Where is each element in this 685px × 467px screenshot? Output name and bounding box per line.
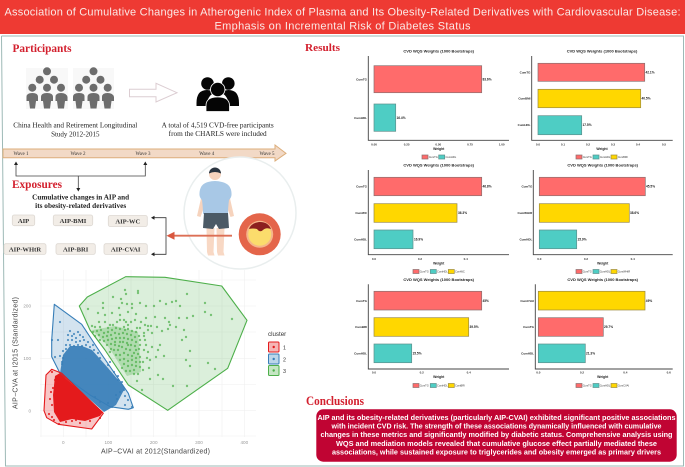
timeline arrow: Wave 1: [13, 152, 29, 157]
bar chart: CumTG, CumWHtR, CumHDL: CumWHtR: [517, 211, 533, 215]
x axis title: AIP−CVAI at 2012(Standardized): [101, 448, 210, 456]
heading: exposures: Exposures: [12, 179, 63, 191]
text: study description: [13, 122, 137, 138]
bar chart: CumTG, CumBRI, CumHDL: 15.5%: [412, 352, 422, 356]
bar chart: CumCVAI, CumTG, CumHDL: 0.0: [536, 370, 541, 374]
exposure box: AIP-WC: [108, 216, 147, 226]
title banner: Emphasis on Incremental Risk of Diabetes Status: [214, 20, 471, 32]
bar chart: CumCVAI, CumTG, CumHDL: CumHDL: [521, 352, 534, 356]
bar chart: CumTG, CumWHtR, CumHDL: CumWHtR: [618, 270, 630, 274]
bar chart: CumTG, CumWHtR, CumHDL: 0.4: [631, 257, 635, 261]
title banner: Association of Cumulative Changes in Atherogenic Index of Plasma and Its Obesity-Related Derivatives with Cardiovascular Disease:: [4, 6, 680, 18]
bar chart: CumTG, CumBRI, CumHDL: CumHDL: [354, 352, 367, 356]
bar chart: CumTG, CumBMI, CumHDL: CumHDL: [518, 123, 531, 127]
bar chart: CumTG, CumBMI, CumHDL: 0.5: [662, 142, 666, 146]
exposure box: AIP-WHtR: [4, 244, 46, 254]
exposure box: AIP-BRI: AIP-BRI: [63, 246, 89, 254]
exposure box: AIP-BMI: AIP-BMI: [60, 218, 87, 225]
bar chart: CumTG, CumWHtR, CumHDL: [517, 162, 673, 274]
cluster legend: 3: [283, 369, 286, 375]
heading: participants: Participants: [12, 41, 72, 55]
bar chart: CumCVAI, CumTG, CumHDL: 29.7%: [604, 325, 613, 329]
text: cohort size: A total of 4,519 CVD-free participants: [162, 122, 274, 130]
bar chart: CumTG vs CumHDL: 83.6%: [482, 78, 492, 82]
arrow: artery to exposures: [166, 232, 232, 240]
bar chart: CumTG, CumWC, CumHDL: CumHDL: [354, 238, 367, 242]
bar chart: CumTG, CumBMI, CumHDL: CumBMI: [618, 155, 628, 159]
bar chart: CumCVAI, CumTG, CumHDL: CumCVAI: [520, 299, 534, 303]
bar chart: CumTG, CumBRI, CumHDL: 45%: [482, 299, 489, 303]
exposure box: AIP-CVAI: AIP-CVAI: [111, 246, 141, 254]
axis tick labels: 300: [195, 440, 203, 445]
bar chart: CumTG, CumWHtR, CumHDL: Weight: [597, 262, 609, 266]
callout: conclusions text: associations, while sustained exposure to triglycerides and obesity emerged as primary drivers: [332, 449, 661, 456]
bar chart: CumTG, CumWHtR, CumHDL: 45.5%: [646, 184, 655, 188]
y axis title: AIP−CVA at I2015 (Standardized): [12, 297, 20, 409]
bar chart: CumTG, CumBMI, CumHDL: CumBMI: [518, 96, 531, 100]
bar chart: CumTG, CumWC, CumHDL: 0.4: [464, 257, 468, 261]
callout: conclusions text: [316, 409, 677, 462]
bar chart: CumTG, CumBRI, CumHDL: [354, 277, 509, 388]
exposure box: AIP: AIP: [18, 218, 29, 225]
bar chart: CumTG, CumWC, CumHDL: 36.3%: [458, 211, 467, 215]
bar chart: CumTG, CumWHtR, CumHDL: CumHDL: [600, 270, 611, 274]
bar chart: CumTG, CumBMI, CumHDL: 0.4: [636, 142, 640, 146]
exposure box: AIP-WHtR: AIP-WHtR: [9, 246, 41, 254]
exposure box: AIP-WC: AIP-WC: [115, 218, 140, 226]
bar chart: CumTG vs CumHDL: CumHDL: [446, 155, 457, 159]
bar chart: CumCVAI, CumTG, CumHDL: 0.4: [623, 370, 628, 374]
bar chart: CumTG, CumBMI, CumHDL: 0.0: [536, 142, 540, 146]
bar chart: CumTG, CumBMI, CumHDL: 0.3: [611, 142, 615, 146]
bar chart: CumTG, CumWC, CumHDL: CVD WQS Weights (1000 Bootstraps): [403, 162, 475, 168]
icon: CVD-free participants: [196, 77, 239, 112]
bar chart: CumTG, CumBRI, CumHDL: 0.4: [467, 370, 471, 374]
bar chart: CumTG, CumBRI, CumHDL: CumBRI: [455, 384, 465, 388]
bar chart: CumTG vs CumHDL: CumHDL: [354, 116, 367, 120]
bar chart: CumTG, CumBMI, CumHDL: [518, 48, 673, 159]
bar chart: CumTG, CumWC, CumHDL: CumHDL: [437, 270, 448, 274]
bar chart: CumTG, CumBMI, CumHDL: 17.5%: [582, 123, 592, 127]
bar chart: CumTG, CumBMI, CumHDL: CVD WQS Weights (1000 Bootstraps): [567, 48, 638, 54]
bar chart: CumCVAI, CumTG, CumHDL: 0.2: [580, 370, 584, 374]
text: exposures description: [32, 194, 129, 210]
heading: results: Results: [305, 42, 341, 54]
bar chart: CumTG, CumWC, CumHDL: CumTG: [356, 184, 368, 188]
cluster 1 hull: [44, 369, 103, 429]
cluster 3 hull: [79, 277, 247, 410]
exposure box: AIP: [12, 215, 35, 226]
bar chart: CumTG, CumBRI, CumHDL: Weight: [433, 375, 445, 379]
timeline arrow: Wave 5: [259, 152, 275, 157]
bar chart: CumTG, CumBRI, CumHDL: 0.2: [420, 370, 424, 374]
title banner: [0, 0, 685, 34]
cluster legend: 1: [283, 346, 286, 352]
bar chart: CumTG, CumBMI, CumHDL: CumHDL: [600, 155, 611, 159]
bar chart: CumCVAI, CumTG, CumHDL: CumHDL: [600, 384, 611, 388]
bar chart: CumTG, CumBRI, CumHDL: 39.5%: [470, 325, 479, 329]
bar chart: CumCVAI, CumTG, CumHDL: 21.3%: [586, 352, 595, 356]
text: study description: Study 2012-2015: [51, 130, 100, 138]
bar chart: CumTG, CumBRI, CumHDL: 0.0: [372, 370, 376, 374]
bar chart: CumCVAI, CumTG, CumHDL: CVD WQS Weights (1000 Bootstraps): [567, 277, 639, 282]
bar chart: CumTG, CumWHtR, CumHDL: CumTG: [583, 270, 592, 274]
bar chart: CumCVAI, CumTG, CumHDL: 0.6: [667, 370, 671, 374]
scatter plot: clusters: [12, 270, 286, 456]
bar chart: CumTG, CumBMI, CumHDL: CumTG: [520, 70, 531, 74]
text: study description: China Health and Retirement Longitudinal: [13, 122, 137, 130]
arrow: hollow selection arrow: [130, 83, 177, 102]
callout: conclusions text: WQS and mediation models revealed that cumulative glucose effect partially mediated these: [336, 441, 657, 448]
text: exposures description: its obesity-related derivatives: [35, 203, 127, 210]
icon: study population group 1: [26, 67, 68, 109]
timeline arrow: Wave 4: [199, 152, 215, 157]
bar chart: CumTG, CumBMI, CumHDL: 0.2: [586, 142, 590, 146]
arrow: wave bracket: [14, 162, 147, 192]
text: cohort size: [162, 122, 274, 138]
exposure box: AIP-BRI: [56, 244, 95, 254]
bar chart: CumTG, CumWC, CumHDL: 46.8%: [482, 184, 492, 188]
bar chart: CumTG, CumBMI, CumHDL: CumTG: [583, 155, 592, 159]
axis tick labels: 200: [150, 440, 158, 445]
bar chart: CumCVAI, CumTG, CumHDL: CumTG: [523, 325, 535, 329]
timeline arrow: Wave 2: [70, 152, 86, 157]
bar chart: CumTG vs CumHDL: 0.25: [404, 142, 410, 146]
bar chart: CumTG, CumWHtR, CumHDL: CumTG: [521, 184, 533, 188]
bar chart: CumTG, CumBMI, CumHDL: 42.1%: [646, 70, 655, 74]
bar chart: CumTG, CumWC, CumHDL: 16.9%: [414, 238, 423, 242]
bar chart: CumTG vs CumHDL: Weight: [433, 147, 445, 151]
cluster legend: [268, 331, 286, 376]
cluster legend: 2: [283, 358, 286, 364]
axis tick labels: 100: [104, 440, 113, 445]
bar chart: CumTG, CumWC, CumHDL: 0.2: [418, 257, 422, 261]
bar chart: CumTG vs CumHDL: 0.75: [467, 142, 473, 146]
callout: conclusions text: changes in these metrics and significantly modified by diabetic status. Comprehensive analysis using: [320, 432, 672, 439]
bar chart: CumTG, CumBRI, CumHDL: CumBRI: [355, 325, 367, 329]
bar chart: CumTG, CumWC, CumHDL: CumTG: [420, 270, 429, 274]
bar chart: CumTG, CumBRI, CumHDL: CumTG: [356, 299, 368, 303]
timeline arrow: Wave 3: [135, 152, 151, 157]
axis tick labels: [23, 304, 249, 445]
bar chart: CumTG vs CumHDL: 16.4%: [396, 116, 406, 120]
illustration: obesity and artery circle: [166, 157, 296, 269]
callout: conclusions text: with incident CVD risk. The strength of these associations dynamically influenced with cumulative: [330, 424, 662, 431]
bar chart: CumTG, CumBMI, CumHDL: Weight: [596, 147, 608, 151]
bar chart: CumTG, CumWC, CumHDL: 0.0: [372, 257, 376, 261]
bar chart: CumCVAI, CumTG, CumHDL: Weight: [597, 375, 609, 379]
bar chart: CumTG vs CumHDL: 0.00: [371, 142, 377, 146]
icon: artery cross-section: [239, 213, 281, 255]
bar chart: CumTG, CumWHtR, CumHDL: 0.0: [537, 257, 542, 261]
axis tick labels: 400: [240, 440, 249, 445]
axis tick labels: 0: [62, 440, 65, 445]
plot grid: [40, 270, 256, 437]
bar chart: CumTG, CumWHtR, CumHDL: CVD WQS Weights (1000 Bootstraps): [567, 162, 639, 168]
cluster 2 hull: [52, 304, 133, 412]
bar chart: CumTG vs CumHDL: [354, 48, 509, 159]
bar chart: CumTG, CumWC, CumHDL: CumWC: [455, 270, 465, 274]
bar chart: CumTG, CumBMI, CumHDL: 0.1: [561, 142, 565, 146]
bar chart: CumTG, CumBMI, CumHDL: 40.5%: [642, 96, 651, 100]
bar chart: CumTG, CumBRI, CumHDL: CumHDL: [437, 384, 448, 388]
bar chart: CumTG, CumWC, CumHDL: [354, 162, 509, 274]
bar chart: CumTG vs CumHDL: CVD WQS Weights (1000 Bootstraps): [403, 48, 475, 54]
callout: conclusions text: AIP and its obesity-related derivatives (particularly AIP-CVAI) exhibited significant positive associations: [318, 415, 676, 422]
bar chart: CumCVAI, CumTG, CumHDL: 49%: [646, 299, 652, 303]
axis tick labels: 200: [23, 304, 31, 309]
bar chart: CumTG, CumWHtR, CumHDL: CumHDL: [519, 238, 532, 242]
bar chart: CumTG vs CumHDL: 0.50: [435, 142, 442, 146]
bar chart: CumTG, CumWHtR, CumHDL: 15.9%: [578, 238, 587, 242]
bar chart: CumTG vs CumHDL: CumTG: [429, 155, 438, 159]
bar chart: CumTG, CumWC, CumHDL: Weight: [433, 262, 445, 266]
text: exposures description: Cumulative changes in AIP and: [32, 194, 129, 201]
bar chart: CumTG vs CumHDL: CumTG: [356, 78, 368, 82]
icon: person with obesity: [197, 168, 234, 256]
bar chart: CumTG, CumWHtR, CumHDL: 0.2: [584, 257, 588, 261]
axis tick labels: 100: [23, 356, 31, 361]
bar chart: CumTG, CumWC, CumHDL: CumWC: [355, 211, 368, 215]
bar chart: CumTG, CumWHtR, CumHDL: 38.6%: [630, 211, 639, 215]
axis tick labels: 0: [28, 408, 31, 414]
text: cohort size: from the CHARLS were included: [169, 130, 267, 138]
cluster legend: cluster: [268, 331, 286, 338]
exposure box: AIP-CVAI: [104, 244, 147, 254]
bar chart: CumTG, CumBRI, CumHDL: CVD WQS Weights (1000 Bootstraps): [403, 277, 475, 282]
timeline arrow: [3, 145, 286, 161]
bar chart: CumCVAI, CumTG, CumHDL: CumCVAI: [618, 384, 629, 388]
heading: conclusions: Conclusions: [306, 394, 364, 408]
bar chart: CumTG vs CumHDL: 1.00: [499, 142, 505, 146]
bar chart: CumTG, CumBRI, CumHDL: CumTG: [420, 384, 429, 388]
bar chart: CumCVAI, CumTG, CumHDL: [520, 277, 673, 388]
arrow: bracket to exposures: [151, 216, 166, 256]
icon: study population group 2: [73, 67, 114, 109]
bar chart: CumCVAI, CumTG, CumHDL: CumTG: [583, 384, 592, 388]
exposure box: AIP-BMI: [53, 215, 93, 226]
